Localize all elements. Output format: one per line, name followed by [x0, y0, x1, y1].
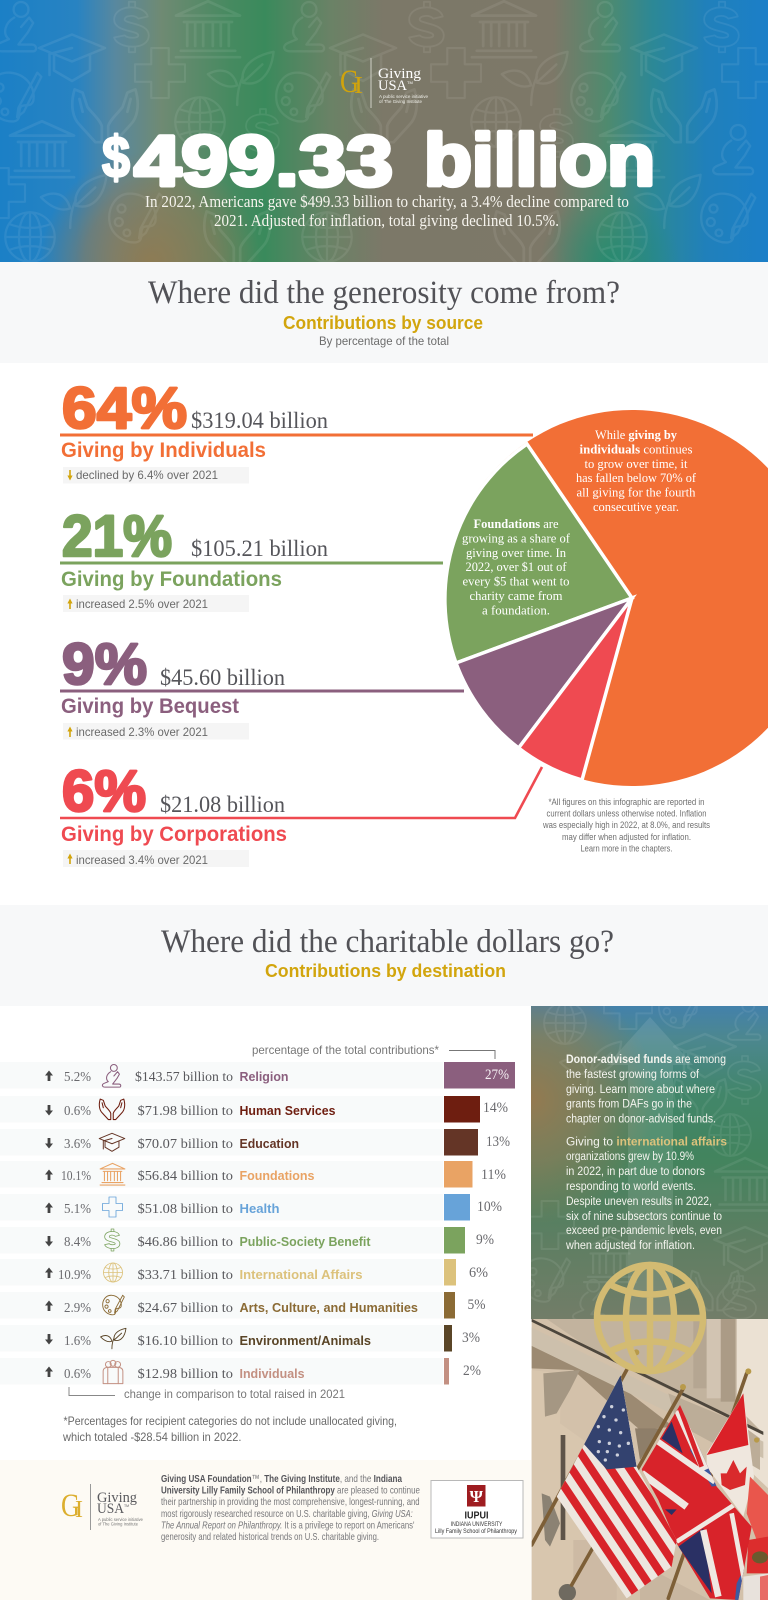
- source: bequest: increased 2.3% over 2021: [76, 725, 208, 739]
- destination row: environment/animals: Environment/Animals: [240, 1333, 371, 1348]
- callout: foundations: every $5 that went to: [462, 575, 570, 589]
- footer partnership statement: generosity and related historical trends on U.S. charitable giving.: [161, 1531, 379, 1543]
- source: individuals: $319.04 billion: [191, 408, 328, 433]
- destination row: human services: 14%: [483, 1100, 508, 1116]
- percentage column label: percentage of the total contributions*: [252, 1043, 439, 1057]
- sidebar text: international affairs: six of nine subsectors continue to: [566, 1211, 722, 1223]
- destination row: human services: 0.6%: [64, 1103, 91, 1118]
- destination row: education: Education: [240, 1136, 299, 1151]
- section heading band: destinations: [0, 905, 768, 1006]
- destination row: individuals: 2%: [463, 1363, 481, 1379]
- footer logo: I: [75, 1497, 83, 1523]
- pie footnote: was especially high in 2022, at 8.0%, and results: [542, 820, 710, 830]
- destination row: arts, culture, humanities: 5%: [468, 1297, 486, 1313]
- footer partnership statement: University Lilly Family School of Philanthropy are pleased to continue: [161, 1485, 420, 1497]
- hero summary text: In 2022, Americans gave $499.33 billion to charity, a 3.4% decline compared to: [145, 192, 629, 211]
- destination row: public-society benefit: 8.4%: [64, 1234, 91, 1249]
- footer partnership statement: their partnership in providing the most comprehensive, longest-running, and: [161, 1496, 420, 1508]
- footer logo: Giving: [97, 1490, 137, 1506]
- sidebar text: donor-advised funds: grants from DAFs go in the: [566, 1098, 692, 1110]
- destination row: individuals: $12.98 billion to: [138, 1367, 233, 1382]
- change label: change in comparison to total raised in 2021: [124, 1387, 345, 1401]
- destination row: education: [0, 1129, 510, 1156]
- footer logo: G: [61, 1488, 80, 1524]
- flag: canada: [707, 1393, 768, 1600]
- source: individuals: [60, 376, 533, 484]
- source: corporations: increased 3.4% over 2021: [76, 853, 208, 867]
- destination row: international affairs: 10.9%: [58, 1267, 91, 1282]
- destination row: foundations: Foundations: [240, 1168, 314, 1183]
- destination row: religion: [0, 1062, 515, 1088]
- flag: union jack: [642, 1405, 752, 1600]
- destination row: public-society benefit: Public-Society Benefit: [240, 1234, 371, 1249]
- IUPUI logo box: [431, 1480, 523, 1538]
- footer partnership statement: Giving USA Foundation™, The Giving Institute, and the Indiana: [161, 1473, 402, 1485]
- destination row: foundations: $56.84 billion to: [138, 1169, 233, 1184]
- footer logo: [61, 1484, 144, 1530]
- destination row: environment/animals: 3%: [462, 1330, 480, 1346]
- destination row: human services: $71.98 billion to: [138, 1104, 233, 1119]
- source: foundations: [60, 504, 443, 612]
- sidebar text: international affairs: when adjusted for inflation.: [565, 1240, 695, 1252]
- building facade: [530, 1317, 768, 1600]
- sidebar text: donor-advised funds: the fastest growing forms of: [566, 1069, 700, 1081]
- sidebar text: international affairs: Despite uneven results in 2022,: [566, 1196, 712, 1208]
- pie chart: contributions by source: [444, 410, 768, 786]
- sidebar photo: flags on building: [530, 1310, 768, 1600]
- callout: foundations: growing as a share of: [462, 531, 571, 545]
- IUPUI logo box: IUPUI: [464, 1510, 489, 1522]
- headline: total giving: [102, 120, 655, 202]
- destination row: international affairs: International Affairs: [240, 1267, 362, 1282]
- destination row: foundations: [0, 1161, 506, 1188]
- source: bequest: 9%: [62, 632, 147, 697]
- callout: foundations: a foundation.: [482, 603, 550, 617]
- hero summary text: [145, 192, 629, 230]
- logo: Giving USA: G: [340, 64, 359, 100]
- callout: foundations: [462, 517, 571, 617]
- logo: Giving USA: USA: [378, 78, 408, 94]
- destination row: environment/animals: [0, 1325, 480, 1352]
- pie footnote: may differ when adjusted for inflation.: [562, 832, 691, 842]
- callout: individuals: While giving by: [595, 428, 678, 442]
- hero banner: [0, 0, 768, 264]
- footer logo: TM: [124, 1504, 129, 1508]
- callout: individuals: consecutive year.: [593, 500, 679, 514]
- destination row: individuals: [0, 1358, 481, 1384]
- pie footnote: *All figures on this infographic are reported in: [548, 797, 704, 807]
- destination row: health: 10%: [477, 1199, 502, 1215]
- pie footnote: [542, 797, 710, 853]
- destination row: religion: 27%: [485, 1067, 509, 1083]
- IUPUI logo box: Lilly Family School of Philanthropy: [435, 1529, 517, 1535]
- sidebar text: international affairs: in 2022, in part due to donors: [566, 1166, 705, 1178]
- callout: individuals: individuals continues: [580, 442, 693, 456]
- source: bequest: $45.60 billion: [160, 665, 285, 690]
- section heading band: destinations: Where did the charitable dollars go?: [161, 924, 614, 960]
- headline: total giving: 499.33: [134, 122, 393, 202]
- source: foundations: $105.21 billion: [191, 536, 328, 561]
- source: corporations: $21.08 billion: [160, 792, 285, 817]
- destination row: health: Health: [240, 1201, 280, 1216]
- source: corporations: [60, 759, 542, 867]
- section heading band: sources: [0, 262, 768, 363]
- callout: individuals: [576, 428, 697, 514]
- headline: total giving: $: [102, 125, 130, 190]
- hero icon pattern: [0, 1, 768, 264]
- sidebar text: donor-advised funds: chapter on donor-advised funds.: [566, 1114, 716, 1126]
- destination row: international affairs: [0, 1259, 488, 1286]
- logo: Giving USA: [340, 58, 428, 108]
- footer logo: USA: [97, 1501, 124, 1517]
- footer logo: of The Giving Institute: [98, 1522, 139, 1526]
- destination row: human services: Human Services: [240, 1103, 336, 1118]
- destination row: environment/animals: $16.10 billion to: [138, 1334, 233, 1349]
- callout: individuals: has fallen below 70% of: [576, 471, 697, 485]
- destination row: human services: [0, 1096, 508, 1122]
- destination row: individuals: 0.6%: [64, 1366, 91, 1381]
- destination row: education: $70.07 billion to: [138, 1137, 233, 1152]
- destination row: arts, culture, humanities: [0, 1292, 486, 1318]
- section heading band: sources: Contributions by source: [283, 313, 483, 333]
- source: corporations: Giving by Corporations: [61, 823, 287, 846]
- footer partnership statement: The Annual Report on Philanthropy. It is a privilege to report on Americans': [161, 1519, 414, 1531]
- source: individuals: declined by 6.4% over 2021: [76, 468, 218, 482]
- destination row: foundations: 11%: [481, 1167, 506, 1183]
- icon: gold globe: [597, 1265, 703, 1371]
- destination row: education: 13%: [486, 1134, 510, 1150]
- sidebar text: international affairs: Giving to international affairs: [566, 1136, 727, 1148]
- logo: Giving USA: I: [354, 73, 363, 99]
- sidebar text: international affairs: responding to world events.: [566, 1181, 696, 1193]
- source: foundations: 21%: [62, 504, 172, 569]
- pie footnote: Learn more in the chapters.: [580, 843, 672, 853]
- destination row: public-society benefit: $46.86 billion to: [138, 1235, 233, 1250]
- footer: [0, 1460, 531, 1600]
- sidebar text: donor-advised funds: [566, 1054, 726, 1126]
- allocation footnote: *Percentages for recipient categories do not include unallocated giving,: [64, 1414, 397, 1428]
- hero summary text: 2021. Adjusted for inflation, total giving declined 10.5%.: [214, 211, 559, 230]
- allocation footnote: which totaled -$28.54 billion in 2022.: [62, 1430, 241, 1444]
- section heading band: sources: By percentage of the total: [319, 334, 449, 348]
- destination row: public-society benefit: 9%: [476, 1232, 494, 1248]
- source: bequest: Giving by Bequest: [61, 695, 239, 718]
- source: individuals: 64%: [62, 376, 187, 441]
- callout: foundations: giving over time. In: [466, 546, 567, 560]
- flag poles: [532, 1370, 747, 1598]
- translucent up arrow: [607, 1017, 693, 1319]
- footer logo: A public service initiative: [98, 1517, 144, 1522]
- destination row: environment/animals: 1.6%: [64, 1333, 91, 1348]
- destination row: health: 5.1%: [64, 1201, 91, 1216]
- callout: foundations: charity came from: [470, 589, 563, 603]
- destination row: religion: $143.57 billion to: [135, 1070, 233, 1085]
- destination row: arts, culture, humanities: $24.67 billion to: [138, 1301, 233, 1316]
- IUPUI logo box: INDIANA UNIVERSITY: [451, 1522, 502, 1528]
- source: individuals: Giving by Individuals: [61, 439, 266, 462]
- callout: individuals: all giving for the fourth: [576, 486, 696, 500]
- sidebar text: donor-advised funds: giving. Learn more about where: [566, 1084, 715, 1096]
- destination row: individuals: Individuals: [240, 1366, 304, 1381]
- logo: Giving USA: Giving: [378, 66, 421, 82]
- destination row: public-society benefit: [0, 1227, 494, 1254]
- callout: individuals: to grow over time, it: [584, 457, 688, 471]
- logo: Giving USA: A public service initiative: [379, 94, 428, 99]
- destination row: arts, culture, humanities: Arts, Culture, and Humanities: [240, 1300, 418, 1315]
- logo: Giving USA: TM: [407, 80, 413, 85]
- destination row: religion: 5.2%: [64, 1069, 91, 1084]
- callout: foundations: 2022, over $1 out of: [466, 560, 567, 574]
- flag: united states: [556, 1375, 677, 1598]
- sidebar text: international affairs: organizations grew by 10.9%: [566, 1151, 694, 1163]
- pie footnote: current dollars unless otherwise noted. Inflation: [546, 809, 706, 819]
- source: foundations: Giving by Foundations: [61, 568, 282, 591]
- callout: foundations: Foundations are: [474, 517, 559, 531]
- section heading band: destinations: Contributions by destination: [265, 961, 506, 981]
- sidebar text: international affairs: exceed pre-pandemic levels, even: [566, 1225, 722, 1237]
- destination row: education: 3.6%: [64, 1136, 91, 1151]
- sidebar text: international affairs: [565, 1136, 727, 1252]
- IUPUI logo box: Ψ: [470, 1487, 484, 1506]
- source: bequest: [60, 632, 464, 740]
- sidebar icon pattern: [531, 1006, 768, 1319]
- destination row: religion: Religion: [240, 1069, 289, 1084]
- footer partnership statement: [161, 1473, 420, 1543]
- logo: Giving USA: of The Giving Institute: [379, 99, 422, 104]
- source: corporations: 6%: [62, 759, 146, 824]
- sidebar text: donor-advised funds: Donor-advised funds are among: [566, 1054, 726, 1066]
- section heading band: sources: Where did the generosity come from?: [148, 275, 620, 311]
- destination row: foundations: 10.1%: [61, 1168, 91, 1183]
- sidebar panel: [531, 1006, 768, 1319]
- footer partnership statement: most rigorously researched resource on U.S. charitable giving, Giving USA:: [161, 1508, 413, 1520]
- destination row: international affairs: $33.71 billion to: [138, 1268, 233, 1283]
- destination row: international affairs: 6%: [469, 1265, 488, 1281]
- source: foundations: increased 2.5% over 2021: [76, 597, 208, 611]
- destination row: arts, culture, humanities: 2.9%: [64, 1300, 91, 1315]
- destination row: health: $51.08 billion to: [138, 1202, 233, 1217]
- headline: total giving: billion: [424, 120, 655, 201]
- allocation footnote: [62, 1414, 397, 1444]
- destination row: health: [0, 1194, 502, 1220]
